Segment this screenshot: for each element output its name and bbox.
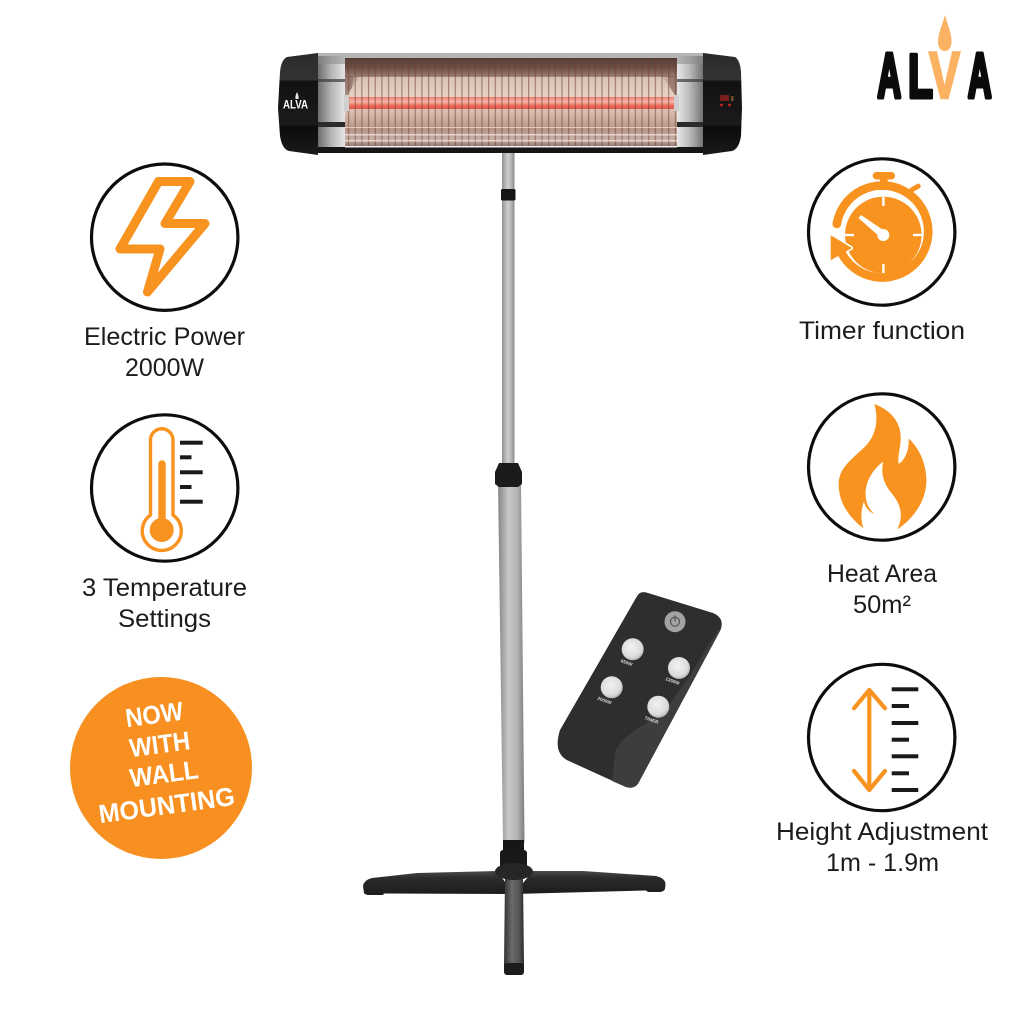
remote button 1350W <box>665 657 690 686</box>
badge: now with wall mounting <box>70 677 252 859</box>
remote button timer <box>644 696 669 725</box>
upper telescopic pole <box>501 150 516 466</box>
badge text <box>97 696 237 829</box>
label: temperature settings <box>82 574 247 633</box>
badge text: MOUNTING <box>97 781 237 829</box>
icon: flame <box>808 394 955 540</box>
label: heat area: 50m² <box>853 591 911 619</box>
remote control <box>558 592 722 788</box>
logo wordmark: A <box>878 42 901 111</box>
icon: lightning bolt <box>92 164 238 310</box>
feature: height adjustment <box>776 664 988 877</box>
feature: timer function <box>799 159 965 345</box>
label: height adjustment <box>776 818 988 877</box>
product: patio heater on stand <box>278 53 742 975</box>
label: heat area <box>827 560 937 619</box>
cap logo flame <box>295 92 299 99</box>
icon: height arrow and scale <box>808 664 955 811</box>
badge text: WITH <box>127 725 192 763</box>
logo wordmark <box>878 38 992 112</box>
digital display <box>720 95 729 101</box>
label: electric power: Electric Power <box>84 323 245 351</box>
label: timer function: Timer function <box>799 317 965 345</box>
left black end cap with logo <box>278 53 318 155</box>
left silver end <box>318 56 346 147</box>
feature: heat area <box>808 394 955 619</box>
label: height adjustment: Height Adjustment <box>776 818 988 846</box>
remote power button <box>664 611 686 632</box>
label: electric power <box>84 323 245 382</box>
heating window with reflector, quartz tube and grille <box>344 58 679 148</box>
badge text: WALL <box>128 754 200 793</box>
feature: temperature settings <box>82 415 247 633</box>
cap logo: ALVA <box>283 100 308 112</box>
heater body <box>278 53 742 155</box>
lower telescopic pole <box>495 463 524 851</box>
right black end cap with display <box>703 53 742 155</box>
label: height adjustment: 1m - 1.9m <box>826 849 939 877</box>
feature: electric power <box>84 164 245 382</box>
logo flame <box>938 15 952 51</box>
logo wordmark: V <box>929 38 960 112</box>
label: heat area: Heat Area <box>827 560 937 588</box>
logo wordmark: A <box>968 42 992 111</box>
badge text: NOW <box>123 696 185 733</box>
right silver end <box>676 56 704 147</box>
stand base <box>363 850 666 975</box>
logo wordmark: L <box>908 42 933 111</box>
label: temperature settings: 3 Temperature <box>82 574 247 602</box>
remote button 1350W: 1350W <box>665 676 681 686</box>
remote button 2000W: 2000W <box>597 696 613 706</box>
icon: thermometer <box>92 415 238 561</box>
remote button 2000W <box>597 676 623 706</box>
icon: stopwatch <box>808 159 955 305</box>
remote button 650W <box>620 638 644 667</box>
remote button 650W: 650W <box>620 658 634 667</box>
remote button timer: TIMER <box>644 715 660 725</box>
logo: ALVA <box>878 15 992 112</box>
label: temperature settings: Settings <box>118 605 211 633</box>
top and bottom rim <box>316 53 706 153</box>
label: electric power: 2000W <box>125 354 204 382</box>
